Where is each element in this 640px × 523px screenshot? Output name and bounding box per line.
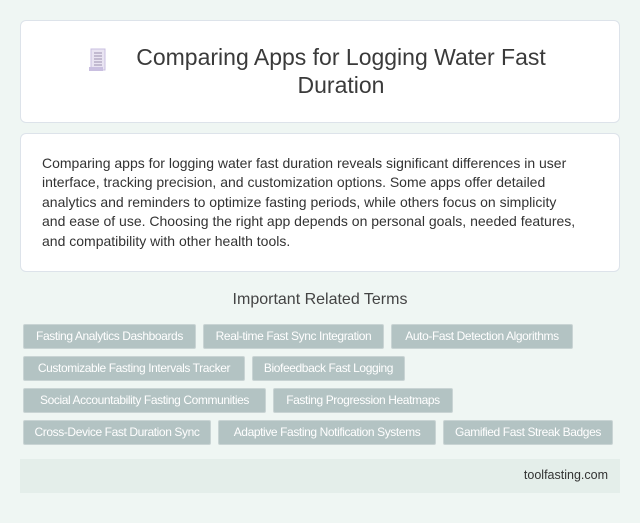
footer: [20, 459, 620, 493]
header card: [20, 20, 620, 123]
footer text: toolfasting.com: [524, 468, 608, 482]
tag 8: Cross-Device Fast Duration Sync: [34, 425, 200, 439]
tag 4: Customizable Fasting Intervals Tracker: [38, 361, 230, 375]
tag 8: [23, 420, 211, 445]
icon: document: [89, 48, 106, 71]
tag 10: Gamified Fast Streak Badges: [455, 425, 601, 439]
tag 3: Auto-Fast Detection Algorithms: [405, 329, 559, 343]
description text: Comparing apps for logging water fast duration reveals significant differences in user interface, tracking precision, and customization options. Some apps offer detailed analytics and reminders to optimize fasting periods, while others focus on simplicity and ease of use. Choosing the right app depends on personal goals, needed features, and compatibility with other health tools.: [42, 155, 575, 249]
tag 2: [203, 324, 384, 349]
tag 1: [23, 324, 196, 349]
related terms heading: Important Related Terms: [233, 291, 407, 308]
tag 5: Biofeedback Fast Logging: [264, 361, 393, 375]
tag 9: Adaptive Fasting Notification Systems: [234, 425, 420, 439]
tag 3: [391, 324, 573, 349]
tag 7: [273, 388, 453, 413]
tag 4: [23, 356, 245, 381]
tag 7: Fasting Progression Heatmaps: [286, 393, 440, 407]
tag 6: Social Accountability Fasting Communities: [40, 393, 249, 407]
tag 1: Fasting Analytics Dashboards: [36, 329, 183, 343]
tag 6: [23, 388, 266, 413]
tag 5: [252, 356, 405, 381]
description card: [20, 133, 620, 272]
tag 10: [443, 420, 613, 445]
title: Comparing Apps for Logging Water Fast Duration: [136, 44, 546, 98]
tag 9: [218, 420, 436, 445]
tag 2: Real-time Fast Sync Integration: [216, 329, 371, 343]
